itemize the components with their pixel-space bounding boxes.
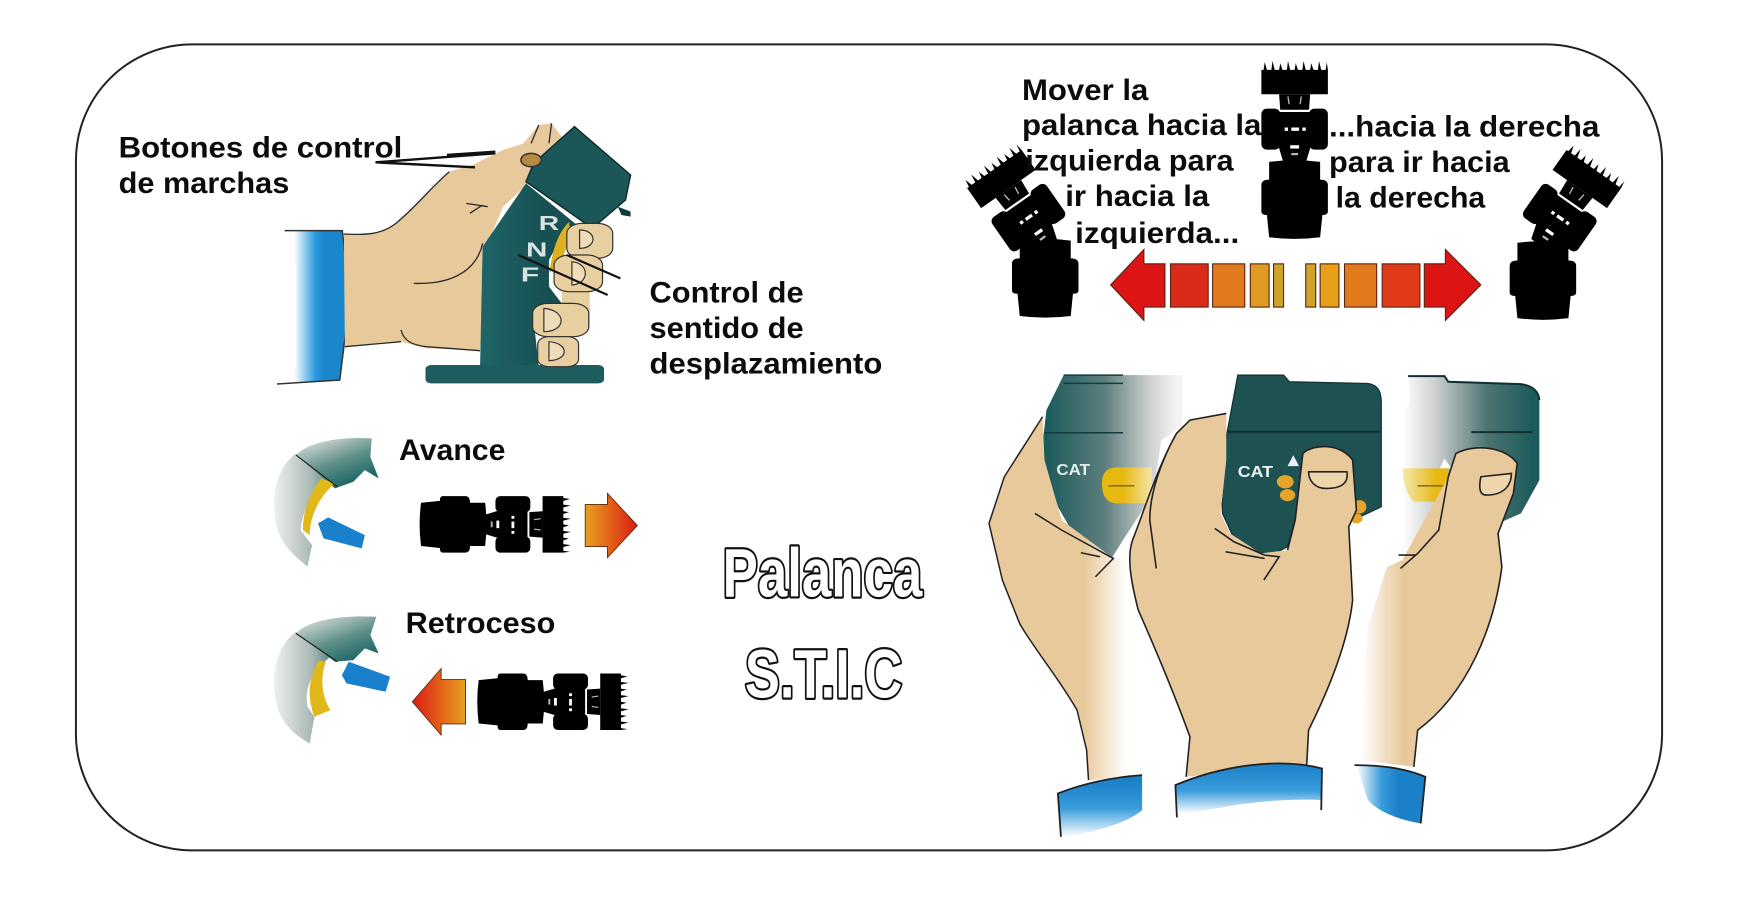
icon: tractor straight <box>1261 61 1328 239</box>
text: move right: la derecha <box>1336 181 1486 214</box>
icon: lever shaft <box>480 183 577 367</box>
text: direction control label: desplazamiento <box>650 348 882 381</box>
letters R N F: F <box>521 263 539 286</box>
text: direction control label: sentido de <box>650 312 804 345</box>
title: Palanca: Palanca <box>723 534 923 611</box>
text: move left: Mover la <box>1022 74 1149 107</box>
centre hand <box>1130 375 1381 817</box>
icon: lever head <box>526 127 631 228</box>
text: move left: ir hacia la <box>1065 180 1210 213</box>
text: gear buttons label <box>119 131 402 200</box>
arrow: reverse <box>412 669 466 735</box>
text: move left <box>1022 74 1262 250</box>
text: move left: izquierda para <box>1025 145 1234 178</box>
centre hand: CAT <box>1238 464 1273 480</box>
icon: lever base <box>425 365 604 383</box>
icon: fingers <box>533 223 613 367</box>
icon: hand <box>344 123 562 350</box>
illustration: three hands on the lever <box>989 375 1539 837</box>
icon: gear buttons <box>521 153 541 167</box>
arrow: forward <box>585 493 637 558</box>
left hand <box>989 375 1182 837</box>
icon: tractor forward <box>420 496 571 553</box>
text: direction control label <box>650 277 882 381</box>
heading: Retroceso: Retroceso <box>406 607 555 640</box>
arrow: right steering bar <box>1306 249 1481 320</box>
icon: tractor turned right <box>1510 143 1626 320</box>
arrow: pointer lines to buttons <box>375 152 495 167</box>
icon: tractor reverse <box>477 674 628 730</box>
text: move right: ...hacia la derecha <box>1329 110 1600 143</box>
icon: forward lever <box>274 438 379 567</box>
text: move left: palanca hacia la <box>1022 109 1262 142</box>
icon: tractor turned left <box>962 143 1078 318</box>
icon: trigger <box>549 222 569 273</box>
title: S.T.I.C: S.T.I.C <box>745 635 902 712</box>
text: move right <box>1329 110 1600 214</box>
text: move left: izquierda... <box>1075 217 1239 250</box>
text: gear buttons label: Botones de control <box>119 131 402 164</box>
letters R N F: R <box>539 211 559 235</box>
text: gear buttons label: de marchas <box>119 167 289 200</box>
right hand <box>1355 376 1539 823</box>
left hand: CAT <box>1056 462 1090 479</box>
illustration: hand gripping the lever, side view <box>277 123 631 384</box>
arrow: left steering bar <box>1111 249 1284 320</box>
arrow: pointer lines to direction control <box>518 255 620 295</box>
letters R N F <box>521 211 559 286</box>
icon: reverse lever <box>274 616 390 743</box>
text: direction control label: Control de <box>650 277 804 310</box>
letters R N F: N <box>526 238 547 261</box>
icon: blue sleeve <box>277 230 350 384</box>
text: move right: para ir hacia <box>1329 146 1510 179</box>
icon: hand outline and wrinkles <box>344 123 552 351</box>
heading: Avance: Avance <box>399 434 505 467</box>
